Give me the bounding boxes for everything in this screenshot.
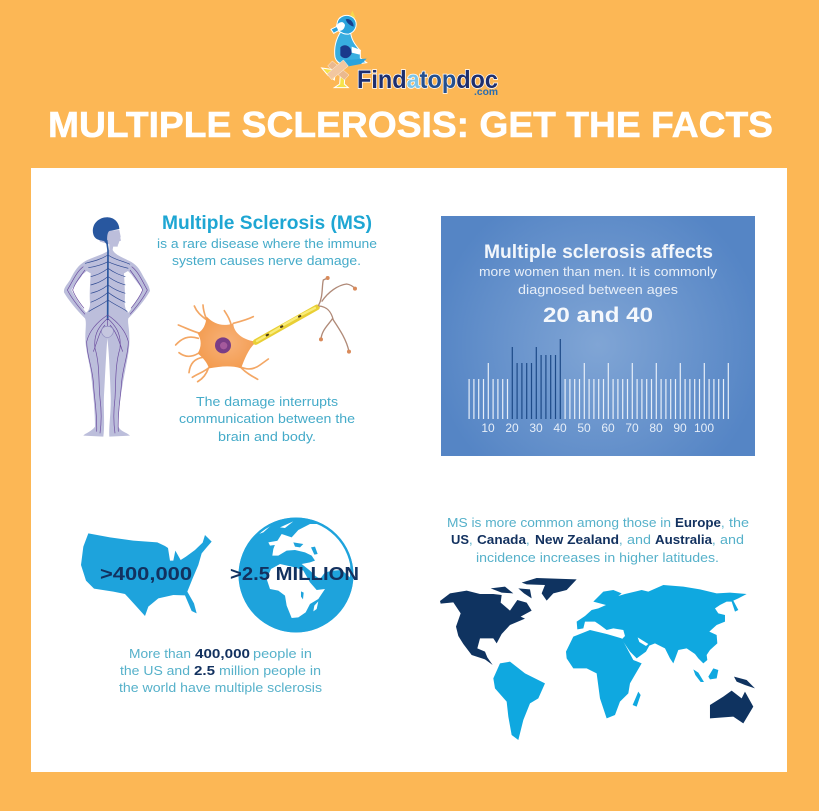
text block: prevalence: the US and bbox=[120, 663, 190, 678]
logo bbox=[322, 11, 498, 98]
text block: prevalence: 400,000 bbox=[195, 646, 250, 661]
text block: prevalence: people in bbox=[253, 646, 312, 661]
icon: globe bbox=[239, 518, 353, 632]
title: MULTIPLE SCLEROSIS: GET THE FACTS bbox=[48, 104, 773, 145]
panel text: more women than men. It is commonly bbox=[479, 264, 718, 279]
text block: geography: and bbox=[720, 532, 744, 547]
chart: age ruler bbox=[469, 339, 728, 435]
text block: geography: US bbox=[451, 532, 469, 547]
text block: damage note bbox=[179, 394, 355, 444]
panel text: diagnosed between ages bbox=[518, 282, 679, 297]
chart axis labels bbox=[481, 421, 714, 435]
chart axis labels: 40 bbox=[553, 421, 567, 435]
chart axis labels: 70 bbox=[625, 421, 639, 435]
text block: geography: , bbox=[469, 532, 473, 547]
panel: age of diagnosis bbox=[441, 216, 755, 456]
text block: geography: New Zealand bbox=[535, 532, 619, 547]
text block: geography: , bbox=[721, 515, 725, 530]
stat: world count: >2.5 MILLION bbox=[230, 564, 359, 584]
text block: geography: Europe bbox=[675, 515, 721, 530]
text block: geography: , bbox=[619, 532, 623, 547]
text block: definition bbox=[157, 236, 377, 268]
icon: human nervous system bbox=[64, 217, 150, 437]
text block: geography: MS is more common among those in bbox=[447, 515, 671, 530]
chart axis labels: 80 bbox=[649, 421, 663, 435]
text block: prevalence: the world have multiple sclerosis bbox=[119, 680, 323, 695]
chart axis labels: 90 bbox=[673, 421, 687, 435]
text block: geography: , bbox=[526, 532, 530, 547]
text block: damage note: brain and body. bbox=[218, 429, 316, 444]
region: other regions bbox=[493, 630, 642, 740]
logo wordmark: Findatopdoc bbox=[357, 66, 498, 94]
text block: geography: Australia bbox=[655, 532, 713, 547]
icon: US map bbox=[81, 533, 212, 616]
chart: world map bbox=[440, 578, 755, 740]
logo suffix: .com bbox=[474, 87, 498, 98]
panel: white card bbox=[31, 168, 787, 772]
panel text bbox=[479, 264, 718, 297]
chart axis labels: 50 bbox=[577, 421, 591, 435]
text block: damage note: The damage interrupts bbox=[196, 394, 339, 409]
icon: neuron bbox=[176, 276, 357, 382]
text block: prevalence bbox=[119, 646, 323, 695]
text block: definition: system causes nerve damage. bbox=[172, 253, 361, 268]
heading: multiple sclerosis definition: Multiple Sclerosis (MS) bbox=[162, 213, 372, 234]
text block: geography: incidence increases in higher latitudes. bbox=[476, 550, 719, 565]
text block: geography bbox=[447, 515, 749, 565]
region: high-incidence regions bbox=[440, 578, 755, 723]
text block: prevalence: 2.5 bbox=[194, 663, 215, 678]
text block: geography: , bbox=[712, 532, 716, 547]
stat: US count: >400,000 bbox=[100, 564, 192, 584]
region: Eurasia bbox=[577, 585, 747, 682]
icon: duck mascot bbox=[322, 11, 367, 88]
age range: 20 and 40 bbox=[543, 304, 653, 327]
text block: geography: the bbox=[729, 515, 749, 530]
text block: geography: and bbox=[627, 532, 651, 547]
chart axis labels: 10 bbox=[481, 421, 495, 435]
chart axis labels: 30 bbox=[529, 421, 543, 435]
text block: prevalence: million people in bbox=[219, 663, 321, 678]
chart axis labels: 60 bbox=[601, 421, 615, 435]
text block: damage note: communication between the bbox=[179, 411, 355, 426]
chart axis labels: 20 bbox=[505, 421, 519, 435]
text block: geography: Canada bbox=[477, 532, 527, 547]
chart axis labels: 100 bbox=[694, 421, 714, 435]
text block: definition: is a rare disease where the immune bbox=[157, 236, 377, 251]
panel heading: Multiple sclerosis affects bbox=[484, 242, 713, 263]
text block: prevalence: More than bbox=[129, 646, 191, 661]
